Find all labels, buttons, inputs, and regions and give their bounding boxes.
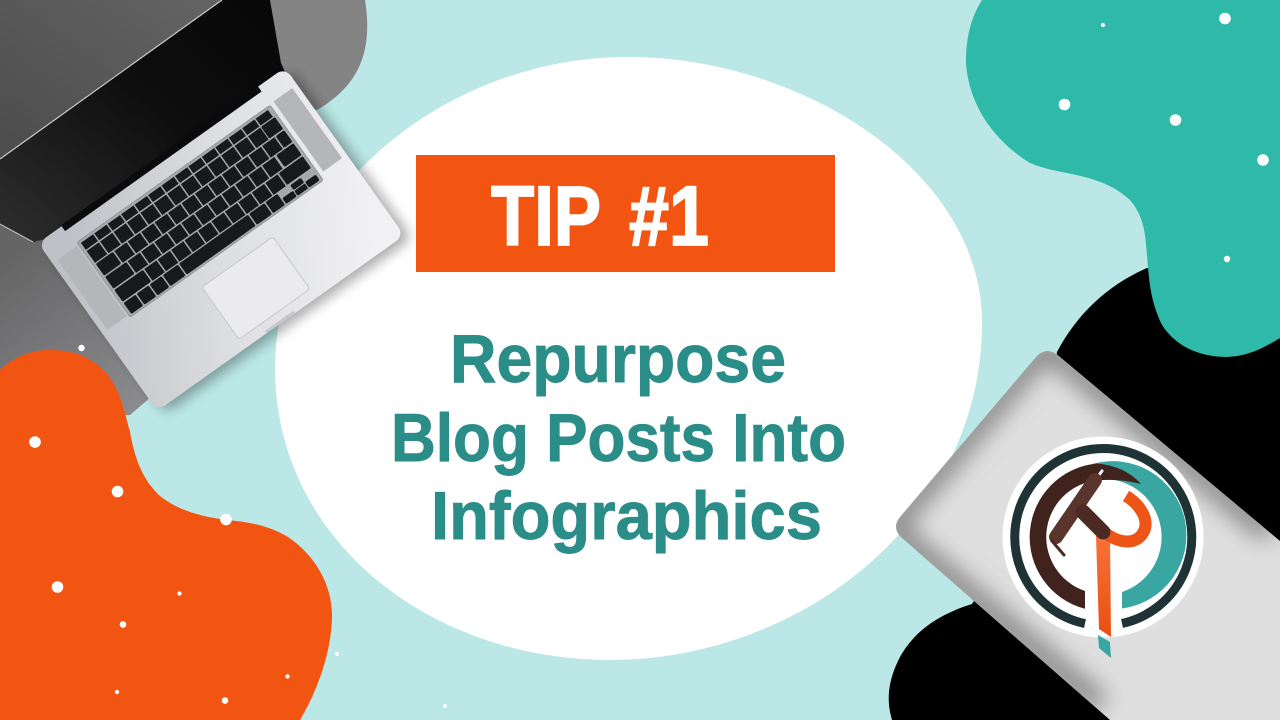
keyboard — [77, 105, 323, 317]
black blob bottom right — [889, 268, 1280, 720]
teal blob top right — [966, 0, 1280, 357]
orange blob dots — [29, 345, 447, 708]
heading: Repurpose — [450, 321, 786, 397]
orange blob bottom left — [0, 345, 447, 720]
tip label — [491, 169, 709, 263]
tip label: #1 — [629, 169, 709, 263]
logo — [1002, 436, 1204, 658]
gray blob upper right — [260, 0, 367, 110]
tip label: TIP — [491, 169, 601, 263]
logo teal crescent — [1092, 461, 1186, 608]
left speaker — [57, 246, 127, 330]
logo letter P — [1096, 496, 1145, 637]
logo letter F — [1052, 471, 1103, 555]
logo brown crescent — [1030, 464, 1141, 609]
gray blob behind laptop — [0, 0, 367, 420]
front notch — [265, 311, 295, 333]
tip banner — [416, 155, 835, 272]
laptop lid back, upper part — [0, 0, 222, 158]
laptop closed lid bottom right — [896, 351, 1280, 720]
logo white disc — [1002, 436, 1204, 638]
laptop base — [37, 64, 412, 417]
logo outer ring — [1015, 449, 1192, 624]
hinge — [61, 86, 262, 231]
heading: Infographics — [431, 478, 822, 554]
teal blob dots — [1059, 13, 1269, 262]
right speaker — [274, 88, 342, 171]
heading: Blog Posts Into — [391, 400, 846, 476]
laptop screen — [0, 0, 285, 242]
heading — [391, 321, 846, 554]
trackpad — [202, 237, 310, 339]
laptop open with keyboard — [0, 0, 412, 417]
logo teal tip — [1098, 635, 1111, 658]
white central blob — [275, 57, 982, 660]
